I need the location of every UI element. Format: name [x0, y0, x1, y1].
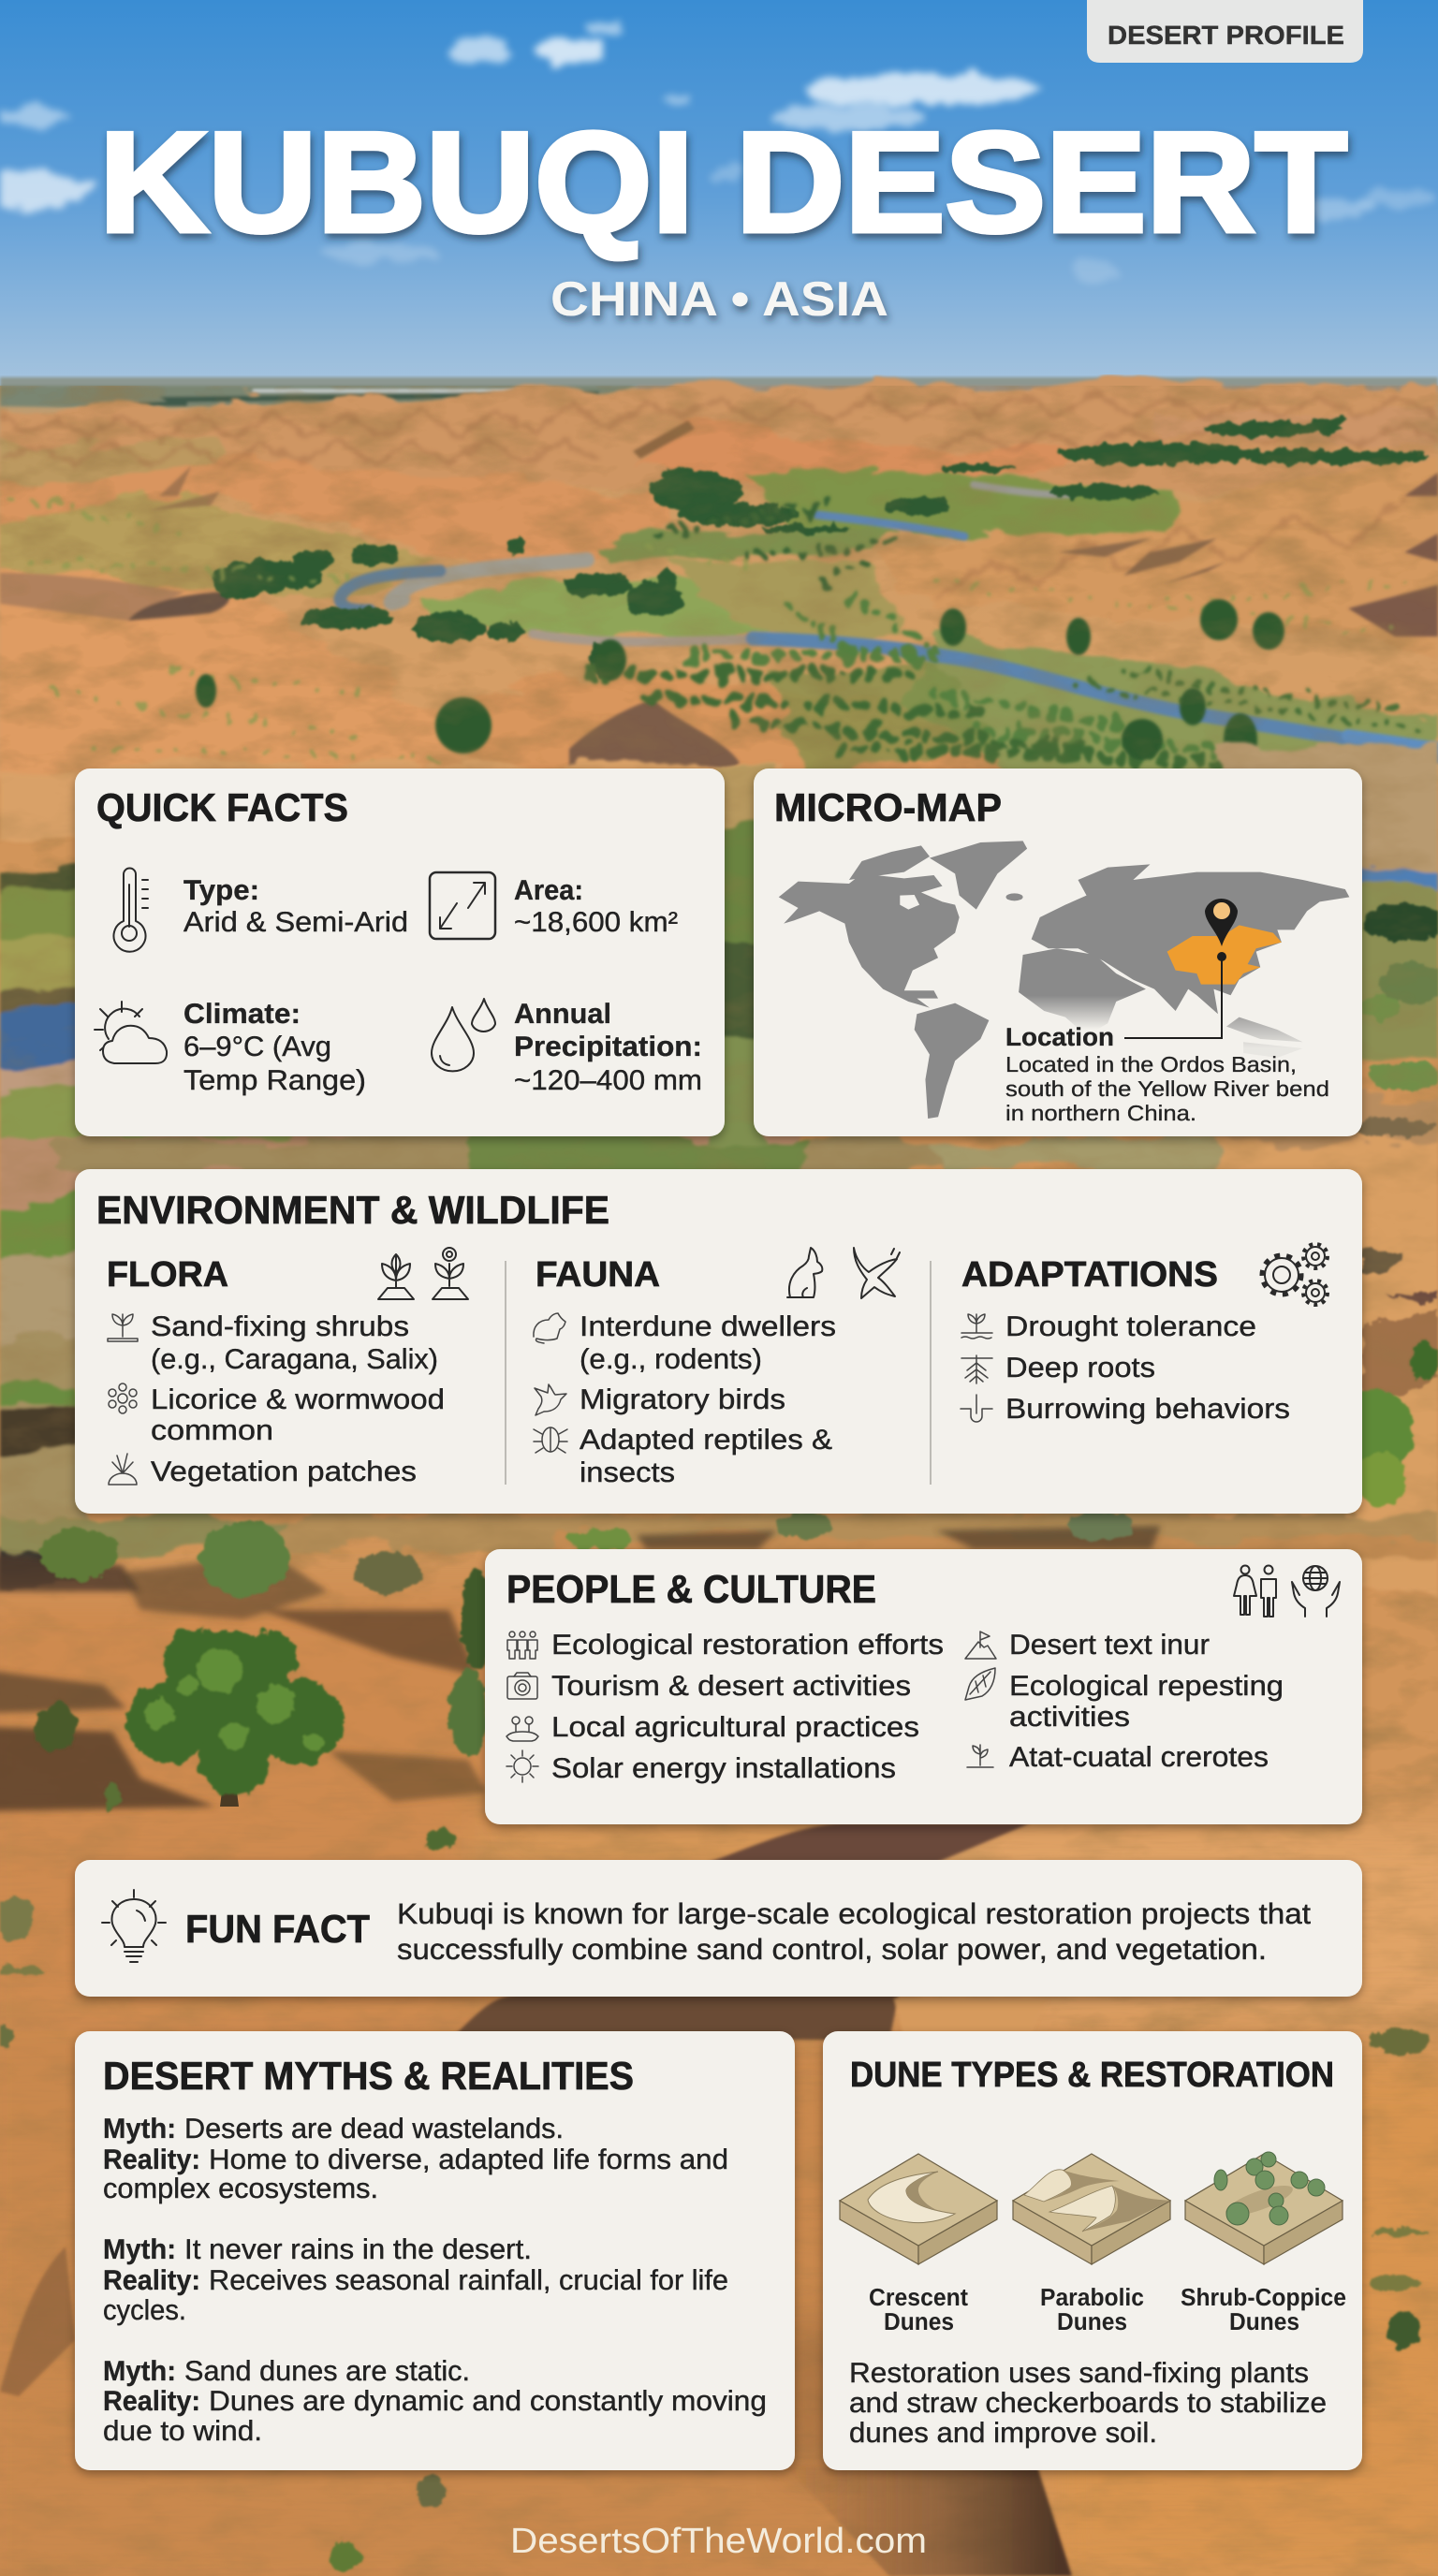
- icon: flag on dune: [965, 1632, 996, 1659]
- far dune ridges: [0, 393, 1438, 599]
- fun fact text: [397, 1897, 1311, 1966]
- adaptations list: Drought tolerance: [1005, 1311, 1256, 1342]
- illustration: crescent dune: [840, 2154, 997, 2264]
- fact: annual precipitation: Annual: [514, 999, 611, 1030]
- shaded gap between lower panels: [771, 2312, 846, 2481]
- location label: Location: [1005, 1023, 1114, 1051]
- river: [340, 485, 1438, 756]
- fact: type: [183, 875, 408, 938]
- panel: desert myths and realities: [75, 2031, 795, 2470]
- panel: environment and wildlife: [75, 1169, 1362, 1514]
- list: right column: Desert text inur: [1009, 1630, 1210, 1661]
- restoration text: Restoration uses sand-fixing plants: [849, 2358, 1309, 2389]
- list: left column: Ecological restoration efforts: [551, 1630, 944, 1661]
- fauna heading: FAUNA: [536, 1255, 660, 1295]
- icon: licorice cluster: [109, 1383, 137, 1413]
- illustration: parabolic dune: [1013, 2154, 1170, 2264]
- fauna list: insects: [580, 1457, 675, 1488]
- panel: quick facts: [75, 768, 725, 1136]
- list: right column: Ecological repesting: [1009, 1671, 1284, 1702]
- dune labels: Dunes: [1057, 2307, 1127, 2335]
- panel: people and culture: [485, 1549, 1362, 1824]
- heading: dune types: DUNE TYPES & RESTORATION: [850, 2056, 1334, 2095]
- myth two: [103, 2234, 728, 2326]
- upper sand band: [0, 1515, 1438, 1556]
- location description: south of the Yellow River bend: [1005, 1076, 1329, 1101]
- fauna list: Migratory birds: [580, 1384, 785, 1415]
- heading: micro-map: MICRO-MAP: [774, 785, 1002, 829]
- tall trees: [196, 599, 1284, 766]
- icon: rabbit and bird: [787, 1248, 900, 1298]
- flora list: [151, 1311, 445, 1487]
- myth three: Reality:: [103, 2386, 200, 2417]
- dune shadows: [0, 420, 1438, 772]
- restoration text: [849, 2358, 1327, 2449]
- myth two: Myth:: [103, 2234, 176, 2265]
- panel: dune types and restoration: [823, 2031, 1362, 2470]
- subtitle: CHINA • ASIA: [550, 272, 888, 327]
- forests: [211, 416, 1428, 677]
- fact: climate: 6–9°C (Avg: [183, 1032, 331, 1062]
- icon: feather: [965, 1668, 995, 1700]
- column: fauna: [534, 1248, 900, 1488]
- heading: environment and wildlife: ENVIRONMENT & WILDLIFE: [96, 1188, 609, 1232]
- restoration text: and straw checkerboards to stabilize: [849, 2388, 1327, 2419]
- fun fact text: Kubuqi is known for large-scale ecological restoration projects that: [397, 1897, 1311, 1930]
- flora list: common: [151, 1415, 273, 1446]
- myth two: It never rains in the desert.: [184, 2234, 532, 2265]
- icon: plant and flower: [378, 1248, 468, 1299]
- dune shadow wedges: [0, 1823, 1072, 2576]
- myth three: Myth:: [103, 2356, 176, 2387]
- dune labels: Dunes: [884, 2307, 954, 2335]
- column: flora: [107, 1248, 468, 1487]
- icon: area arrows: [430, 872, 495, 939]
- fauna list: [580, 1311, 836, 1488]
- fact: area: ~18,600 km²: [514, 907, 678, 938]
- list: left column: Local agricultural practices: [551, 1712, 919, 1743]
- dune labels: Parabolic: [1040, 2283, 1144, 2311]
- location description: Located in the Ordos Basin,: [1005, 1052, 1297, 1076]
- myth one: Reality:: [103, 2144, 200, 2175]
- badge: desert profile: [1087, 0, 1363, 63]
- list: left column: [551, 1630, 944, 1784]
- fact: annual precipitation: [514, 999, 702, 1096]
- green meadows: [422, 470, 1438, 786]
- lower sand: [0, 1591, 1438, 2576]
- fun fact text: successfully combine sand control, solar power, and vegetation.: [397, 1933, 1267, 1966]
- badge: desert profile: DESERT PROFILE: [1108, 21, 1344, 50]
- myth two: Receives seasonal rainfall, crucial for life: [209, 2265, 728, 2296]
- adaptations list: Burrowing behaviors: [1005, 1394, 1290, 1425]
- heading: people and culture: PEOPLE & CULTURE: [506, 1567, 876, 1611]
- restoration text: dunes and improve soil.: [849, 2418, 1157, 2449]
- dune labels: [869, 2283, 1346, 2335]
- dune labels: Dunes: [1229, 2307, 1299, 2335]
- myth one: complex ecosystems.: [103, 2174, 378, 2204]
- flora heading: FLORA: [107, 1255, 228, 1295]
- sand mottling: [0, 1535, 1438, 2576]
- icon: drought plant: [961, 1314, 992, 1339]
- icon: light bulb: [102, 1890, 166, 1962]
- myth one: Deserts are dead wastelands.: [184, 2114, 564, 2144]
- fact: area: Area:: [514, 875, 583, 906]
- desert shrubs: [0, 1343, 1438, 2571]
- list: right column: Atat-cuatal crerotes: [1009, 1742, 1269, 1773]
- icon: rodent: [534, 1313, 565, 1343]
- map pin: [1124, 899, 1238, 1038]
- flora list: Licorice & wormwood: [151, 1384, 445, 1415]
- fact: annual precipitation: Precipitation:: [514, 1032, 702, 1062]
- myth three: Dunes are dynamic and constantly moving: [209, 2386, 767, 2417]
- fact: climate: Climate:: [183, 999, 301, 1030]
- shadows on sand: [0, 1526, 1161, 1811]
- upper land mottling: [0, 402, 1438, 777]
- fauna list: Interdune dwellers: [580, 1311, 836, 1342]
- heading: quick facts: QUICK FACTS: [96, 785, 348, 829]
- list: right column: activities: [1009, 1702, 1130, 1733]
- icon: farm plants: [506, 1717, 538, 1741]
- dune labels: Crescent: [869, 2283, 968, 2311]
- list: left column: Solar energy installations: [551, 1753, 896, 1784]
- icon: beetle: [534, 1427, 567, 1453]
- icon: deep roots: [961, 1355, 992, 1383]
- location description: in northern China.: [1005, 1101, 1196, 1125]
- myth one: Myth:: [103, 2114, 176, 2144]
- fact: climate: [183, 999, 366, 1096]
- footer website: DesertsOfTheWorld.com: [510, 2522, 927, 2561]
- icon: group of people: [507, 1632, 537, 1659]
- icon: shrub: [108, 1314, 138, 1341]
- large tree: [127, 1629, 343, 1807]
- dune labels: Shrub-Coppice: [1181, 2283, 1346, 2311]
- icon: sun and cloud: [95, 1002, 167, 1063]
- myth three: Sand dunes are static.: [184, 2356, 470, 2387]
- column: adaptations: [961, 1244, 1328, 1425]
- icon: small bird: [535, 1384, 566, 1415]
- fauna list: (e.g., rodents): [580, 1344, 762, 1375]
- adaptations list: [1005, 1311, 1290, 1425]
- mid bands: [0, 768, 796, 1591]
- myth three: [103, 2356, 767, 2447]
- dune fields: [0, 384, 1438, 786]
- icon: burrow: [961, 1395, 992, 1422]
- icon: grass mound: [109, 1454, 137, 1485]
- myth two: cycles.: [103, 2295, 186, 2326]
- scattered trees: [0, 496, 1423, 763]
- adaptations list: Deep roots: [1005, 1353, 1155, 1383]
- gap and right side bands: [56, 744, 1438, 1591]
- fact: type: Type:: [183, 875, 259, 906]
- list: right column: [1009, 1630, 1284, 1773]
- icon: people and globe in hands: [1234, 1565, 1340, 1617]
- far horizon: [0, 377, 1438, 408]
- fact: climate: Temp Range): [183, 1065, 366, 1096]
- panel: fun fact: [75, 1860, 1362, 1997]
- illustration: shrub-coppice dune: [1185, 2152, 1343, 2264]
- column divider: [506, 1261, 931, 1485]
- heading: myths and realities: DESERT MYTHS & REALITIES: [103, 2054, 634, 2098]
- fauna list: Adapted reptiles &: [580, 1425, 832, 1456]
- flora list: Sand-fixing shrubs: [151, 1311, 409, 1342]
- title: KUBUQI DESERT: [99, 103, 1347, 262]
- clouds: [0, 21, 1437, 285]
- fact: type: Arid & Semi-Arid: [183, 907, 408, 938]
- list: left column: Tourism & desert activities: [551, 1671, 911, 1702]
- fact: annual precipitation: ~120–400 mm: [514, 1065, 702, 1096]
- icon: water drops: [432, 999, 495, 1071]
- myth two: Reality:: [103, 2265, 200, 2296]
- myth three: due to wind.: [103, 2416, 262, 2447]
- icon: sapling: [967, 1745, 993, 1767]
- flora list: (e.g., Caragana, Salix): [151, 1344, 438, 1375]
- icon: camera: [507, 1673, 537, 1699]
- icon: gears: [1262, 1244, 1328, 1305]
- icon: thermometer: [114, 869, 148, 952]
- world map: [779, 841, 1349, 1119]
- panel: micro-map: [754, 768, 1362, 1136]
- icon: sun: [506, 1750, 538, 1782]
- adaptations heading: ADAPTATIONS: [961, 1255, 1218, 1295]
- location description: [1005, 1052, 1329, 1125]
- sky: [0, 0, 1438, 393]
- myth one: [103, 2114, 728, 2204]
- sand ripples: [0, 1966, 1438, 2576]
- fact: area: [514, 875, 678, 938]
- flora list: Vegetation patches: [151, 1456, 417, 1487]
- myth one: Home to diverse, adapted life forms and: [209, 2144, 728, 2175]
- heading: fun fact: FUN FACT: [185, 1907, 370, 1951]
